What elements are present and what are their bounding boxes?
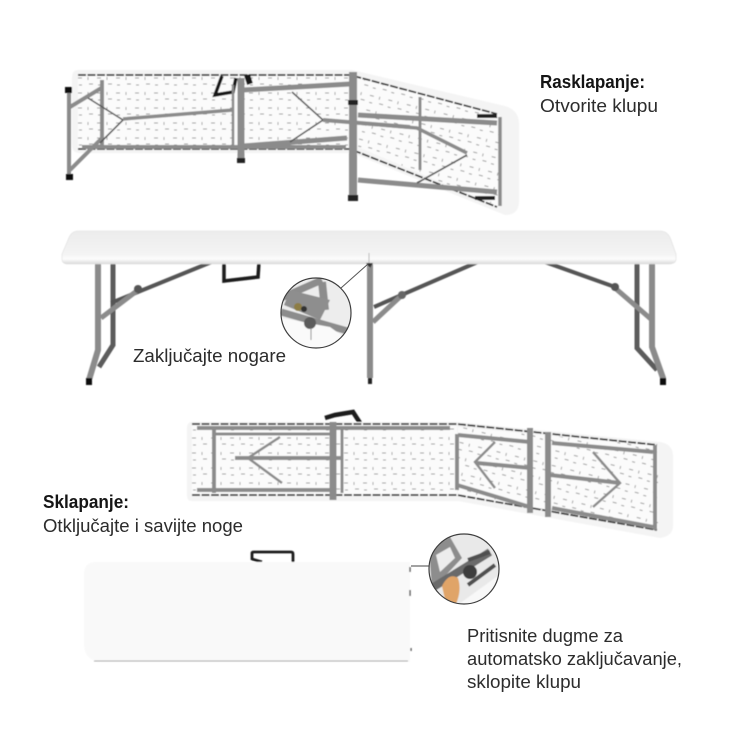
callout: lock button detail <box>411 534 499 604</box>
callout: leg lock detail <box>281 264 368 350</box>
text: Otvorite klupu: Otvorite klupu <box>540 95 658 116</box>
middle leg assembly <box>233 78 410 163</box>
table top <box>62 231 676 264</box>
strap <box>325 412 362 426</box>
text: press-button instruction: automatsko zaključavanje, <box>467 648 682 669</box>
right deck <box>358 77 500 207</box>
left frame <box>197 422 450 500</box>
text: press-button instruction: Pritisnite dugme za <box>467 625 624 646</box>
heading: Rasklapanje: Rasklapanje: <box>540 72 645 92</box>
centre leg <box>368 261 480 384</box>
text: press-button instruction <box>467 625 682 692</box>
right leg assembly <box>358 97 500 206</box>
centre hinge and right frame <box>457 428 655 530</box>
shell <box>187 422 673 538</box>
right deck <box>458 427 658 530</box>
illustration: open bench underside, folding out <box>65 70 519 215</box>
text: Zakljucajte nogare: Zaključajte nogare <box>133 345 286 366</box>
edge frame lines <box>78 75 497 207</box>
hinge leg <box>348 72 358 201</box>
strap handle <box>224 262 259 281</box>
illustration: bench standing, side view <box>62 231 676 385</box>
left deck <box>192 426 457 495</box>
bench top outer shell <box>72 70 519 215</box>
left legs <box>86 261 214 385</box>
right legs <box>542 261 666 385</box>
left deck <box>78 76 352 148</box>
folded panel <box>84 562 410 662</box>
illustration: folded bench <box>84 552 411 662</box>
illustration: bench underside, legs folded <box>187 412 673 538</box>
text: Otkljucajte i savijte noge: Otključajte i savijte noge <box>43 515 243 536</box>
handle strap <box>215 76 236 95</box>
edges <box>192 424 657 530</box>
left leg assembly <box>65 80 346 180</box>
text: press-button instruction: sklopite klupu <box>467 671 581 692</box>
heading: Sklapanje: Sklapanje: <box>43 492 129 512</box>
handle <box>252 552 293 562</box>
